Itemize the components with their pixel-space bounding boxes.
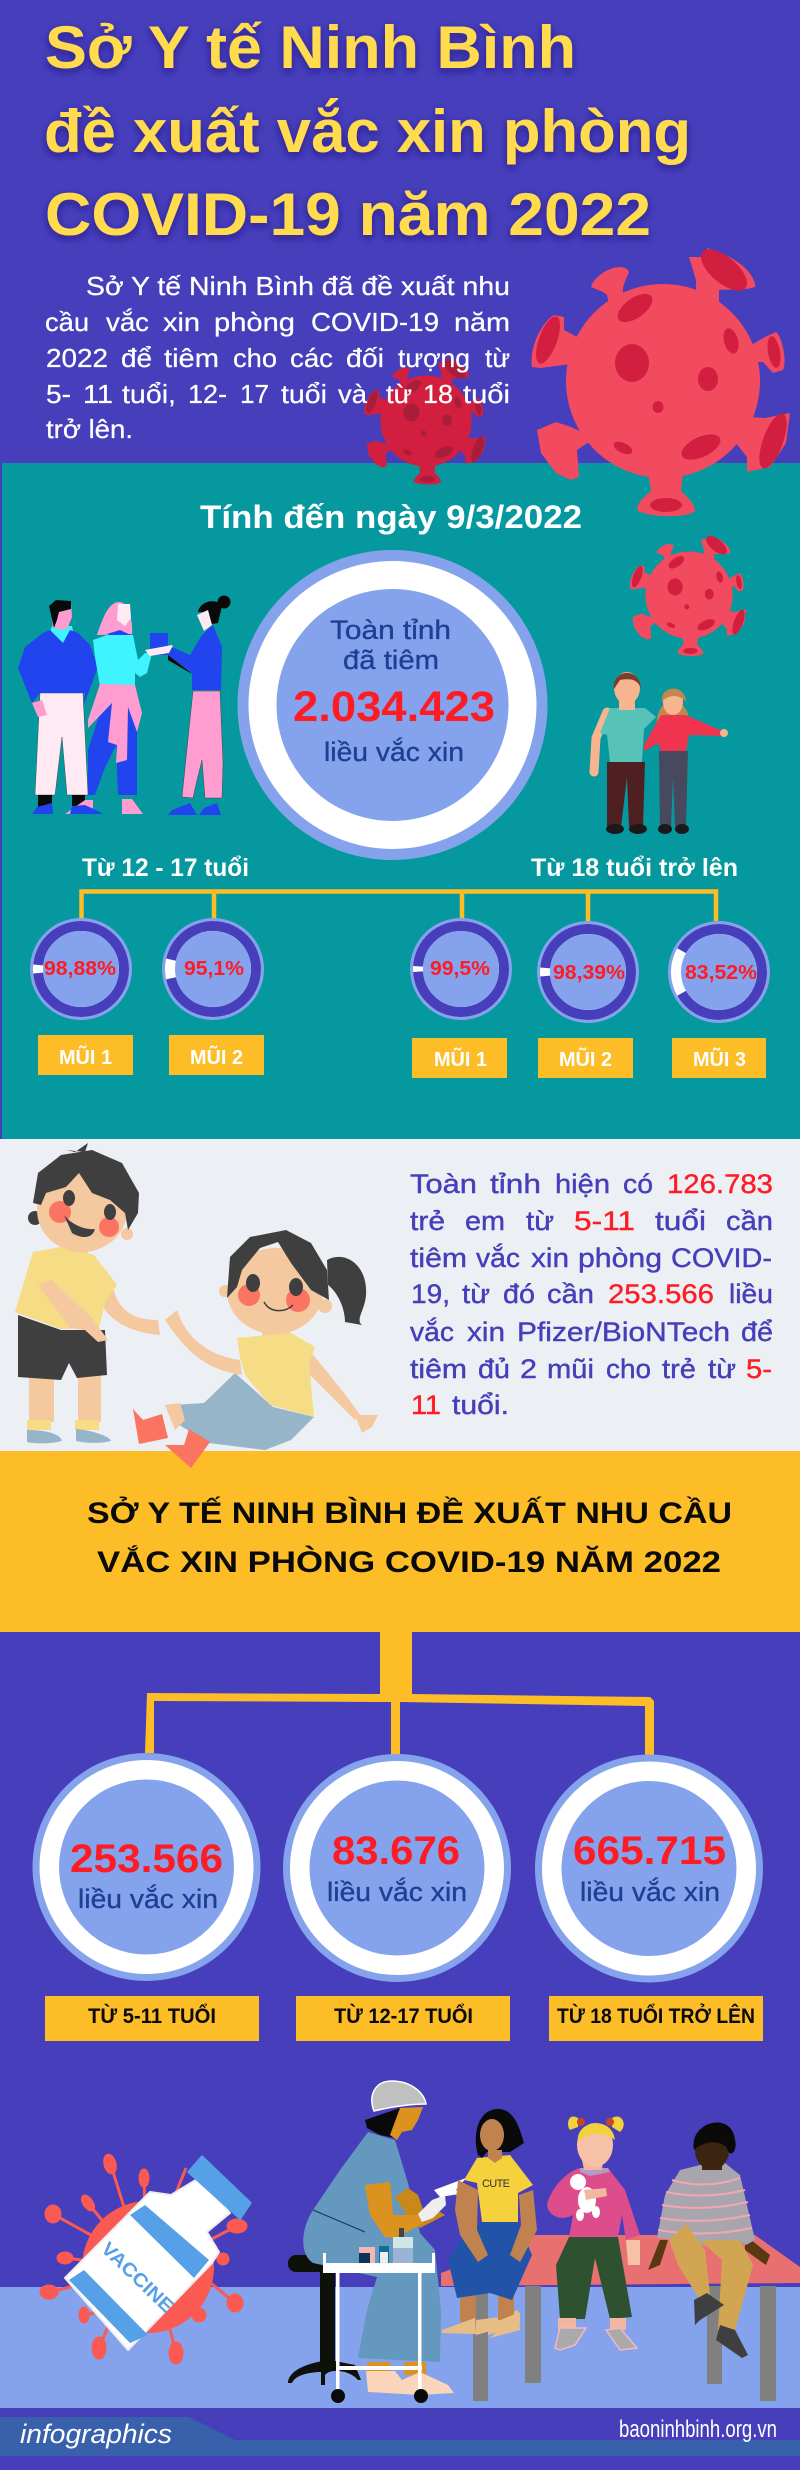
illustration: couple — [594, 672, 728, 834]
children paragraph: 2 — [520, 1354, 537, 1384]
donut: 83,52%: 83,52% — [685, 962, 757, 984]
intro paragraph: 12- — [188, 379, 227, 409]
badge: mũi 2 (18+): MŨI 2 — [559, 1047, 612, 1071]
intro paragraph: cho — [233, 343, 277, 373]
illustration: girl in yellow — [442, 2109, 537, 2338]
children paragraph: cần — [547, 1279, 594, 1309]
children paragraph — [410, 1169, 773, 1420]
children paragraph: tiêm — [410, 1243, 467, 1273]
children paragraph: 5- — [746, 1354, 772, 1384]
children paragraph: phòng — [578, 1243, 662, 1273]
children paragraph: 126.783 — [667, 1169, 773, 1199]
connector: doses tree — [82, 892, 716, 921]
label: age 18+: Từ 18 tuổi trở lên — [531, 854, 738, 882]
badge: mũi 2 (18+) — [538, 1038, 633, 1078]
intro paragraph: phòng — [214, 307, 295, 337]
circle: 18+: 665.715 — [573, 1829, 726, 1873]
children paragraph: tuổi. — [452, 1390, 509, 1420]
title: đề xuất vắc xin phòng — [44, 98, 691, 165]
illustration: three friends — [18, 596, 230, 815]
title: Sở Y tế Ninh Bình — [45, 14, 576, 81]
illustration: table — [441, 2235, 800, 2401]
illustration: stool — [288, 2255, 361, 2385]
donut: 98,39% — [537, 921, 639, 1023]
circle: 18+ — [535, 1754, 763, 1982]
virus: medium in teal — [630, 533, 747, 656]
circle: total doses: Toàn tỉnh — [330, 615, 451, 645]
panel: yellow banner — [0, 1451, 800, 1632]
intro paragraph: COVID-19 — [311, 307, 439, 337]
illustration: children — [15, 1143, 378, 1468]
virus: large — [531, 242, 792, 516]
children paragraph: xin — [531, 1243, 569, 1273]
footer: infographics: infographics — [20, 2419, 172, 2449]
intro paragraph: 5- — [46, 379, 71, 409]
label: age 12-17: Từ 12 - 17 tuổi — [82, 854, 249, 882]
illustration: nurse — [303, 2081, 466, 2395]
donut: 99,5%: 99,5% — [430, 958, 490, 980]
children paragraph: cho — [606, 1354, 651, 1384]
circle: 18+: liều vắc xin — [580, 1876, 720, 1907]
donut: 83,52% — [660, 913, 778, 1031]
children paragraph: vắc — [476, 1242, 520, 1273]
intro paragraph: tuổi, — [122, 379, 176, 409]
children paragraph: đủ — [478, 1354, 510, 1384]
intro paragraph: để — [121, 343, 152, 373]
illustration: girl in yellow: CUTE — [482, 2178, 510, 2190]
circle: total doses: 2.034.423 — [293, 683, 495, 731]
children paragraph: đó — [503, 1279, 535, 1309]
badge: mũi 3 (18+): MŨI 3 — [693, 1047, 746, 1071]
donut: 98,88%: 98,88% — [44, 958, 116, 980]
circle: 5-11: liều vắc xin — [78, 1883, 218, 1914]
children paragraph: mũi — [547, 1354, 594, 1384]
badge: mũi 1 (18+): MŨI 1 — [434, 1047, 487, 1071]
children paragraph: từ — [462, 1279, 490, 1309]
children paragraph: Toàn — [410, 1169, 477, 1199]
children paragraph: 11 — [411, 1390, 441, 1420]
donut: 95,1%: 95,1% — [184, 958, 244, 980]
intro paragraph: trở lên. — [46, 414, 133, 444]
circle: 5-11 — [32, 1753, 260, 1981]
intro paragraph: xin — [163, 307, 200, 337]
children paragraph: tiêm — [410, 1354, 467, 1384]
intro paragraph: từ — [485, 343, 510, 373]
intro paragraph: và — [338, 379, 368, 409]
children paragraph: để — [741, 1317, 773, 1347]
intro paragraph: tượng — [398, 343, 470, 373]
intro paragraph: cầu — [45, 307, 89, 337]
donut: 99,5% — [410, 918, 512, 1020]
donut: 98,88% — [30, 918, 132, 1020]
title — [44, 14, 691, 248]
badge: mũi 1 (18+) — [412, 1038, 507, 1078]
panel: teal statistics — [2, 463, 800, 1139]
intro paragraph: 2022 — [46, 343, 108, 373]
intro paragraph: 17 — [240, 379, 269, 409]
intro paragraph: năm — [454, 307, 510, 337]
title: COVID-19 năm 2022 — [45, 181, 651, 248]
banner heading — [87, 1496, 732, 1579]
children paragraph: cần — [726, 1206, 773, 1236]
illustration: cart — [323, 2228, 435, 2403]
circle: 5-11: 253.566 — [70, 1837, 223, 1881]
label: 5-11 — [45, 1996, 259, 2041]
circle: 12-17 — [283, 1754, 511, 1982]
circle: total doses: đã tiêm — [343, 645, 439, 675]
badge: mũi 2 (12-17) — [169, 1035, 264, 1075]
panel: light children section — [0, 1139, 800, 1451]
children paragraph: COVID- — [671, 1243, 772, 1273]
badge: mũi 1 (12-17) — [38, 1035, 133, 1075]
donut: 98,39%: 98,39% — [553, 962, 625, 984]
intro paragraph: đối — [346, 343, 384, 373]
donut: 95,1% — [162, 918, 264, 1020]
intro paragraph: 11 — [83, 379, 113, 409]
intro paragraph: tuổi — [463, 379, 510, 409]
panel: floor — [0, 2287, 800, 2408]
children paragraph: trẻ — [662, 1354, 696, 1384]
children paragraph: 5-11 — [574, 1206, 635, 1236]
icon: vaccine vial and virus — [41, 2154, 250, 2363]
virus: dark small — [364, 356, 487, 485]
footer band — [0, 2417, 800, 2456]
label: 18+ — [549, 1996, 763, 2041]
banner heading: VẮC XIN PHÒNG COVID-19 NĂM 2022 — [97, 1545, 721, 1579]
connector: proposal tree — [145, 1632, 654, 1755]
intro paragraph — [45, 271, 510, 444]
children paragraph: hiện — [555, 1169, 610, 1199]
badge: mũi 3 (18+) — [672, 1038, 766, 1078]
illustration: blonde child — [547, 2116, 640, 2350]
illustration: boy with cat sweater — [648, 2122, 770, 2358]
intro paragraph: 18 — [423, 379, 453, 409]
children paragraph: có — [623, 1169, 653, 1199]
banner heading: SỞ Y TẾ NINH BÌNH ĐỀ XUẤT NHU CẦU — [87, 1496, 732, 1530]
intro paragraph: tuổi — [281, 379, 327, 409]
label: 12-17: TỪ 12-17 TUỔI — [334, 2004, 473, 2028]
children paragraph: 253.566 — [608, 1279, 714, 1309]
intro paragraph: vắc — [106, 307, 149, 337]
children paragraph: từ — [708, 1354, 736, 1384]
intro paragraph: tiêm — [164, 343, 219, 373]
children paragraph: từ — [526, 1206, 554, 1236]
intro paragraph: Sở Y tế Ninh Bình đã đề xuất nhu — [86, 271, 510, 301]
label: 12-17 — [296, 1996, 510, 2041]
children paragraph: tuổi — [655, 1206, 706, 1236]
intro paragraph: các — [290, 343, 333, 373]
children paragraph: 19, — [411, 1279, 450, 1309]
children paragraph: xin — [467, 1317, 505, 1347]
badge: mũi 2 (12-17): MŨI 2 — [190, 1045, 243, 1069]
circle: total doses — [238, 550, 548, 860]
heading: date: Tính đến ngày 9/3/2022 — [200, 499, 582, 535]
circle: total doses: liều vắc xin — [324, 736, 464, 767]
circle: 12-17: liều vắc xin — [327, 1876, 467, 1907]
children paragraph: liều — [729, 1279, 773, 1309]
label: 18+: TỪ 18 TUỔI TRỞ LÊN — [557, 2004, 755, 2028]
children paragraph: trẻ — [410, 1206, 445, 1236]
children paragraph: vắc — [410, 1316, 454, 1347]
children paragraph: Pfizer/BioNTech — [517, 1317, 730, 1347]
intro paragraph: từ — [386, 379, 412, 409]
circle: 12-17: 83.676 — [332, 1829, 460, 1873]
children paragraph: em — [465, 1206, 505, 1236]
icon: vaccine vial and virus: VACCINE — [97, 2238, 177, 2318]
children paragraph: tỉnh — [490, 1169, 541, 1199]
badge: mũi 1 (12-17): MŨI 1 — [59, 1045, 112, 1069]
label: 5-11: TỪ 5-11 TUỔI — [88, 2004, 216, 2028]
